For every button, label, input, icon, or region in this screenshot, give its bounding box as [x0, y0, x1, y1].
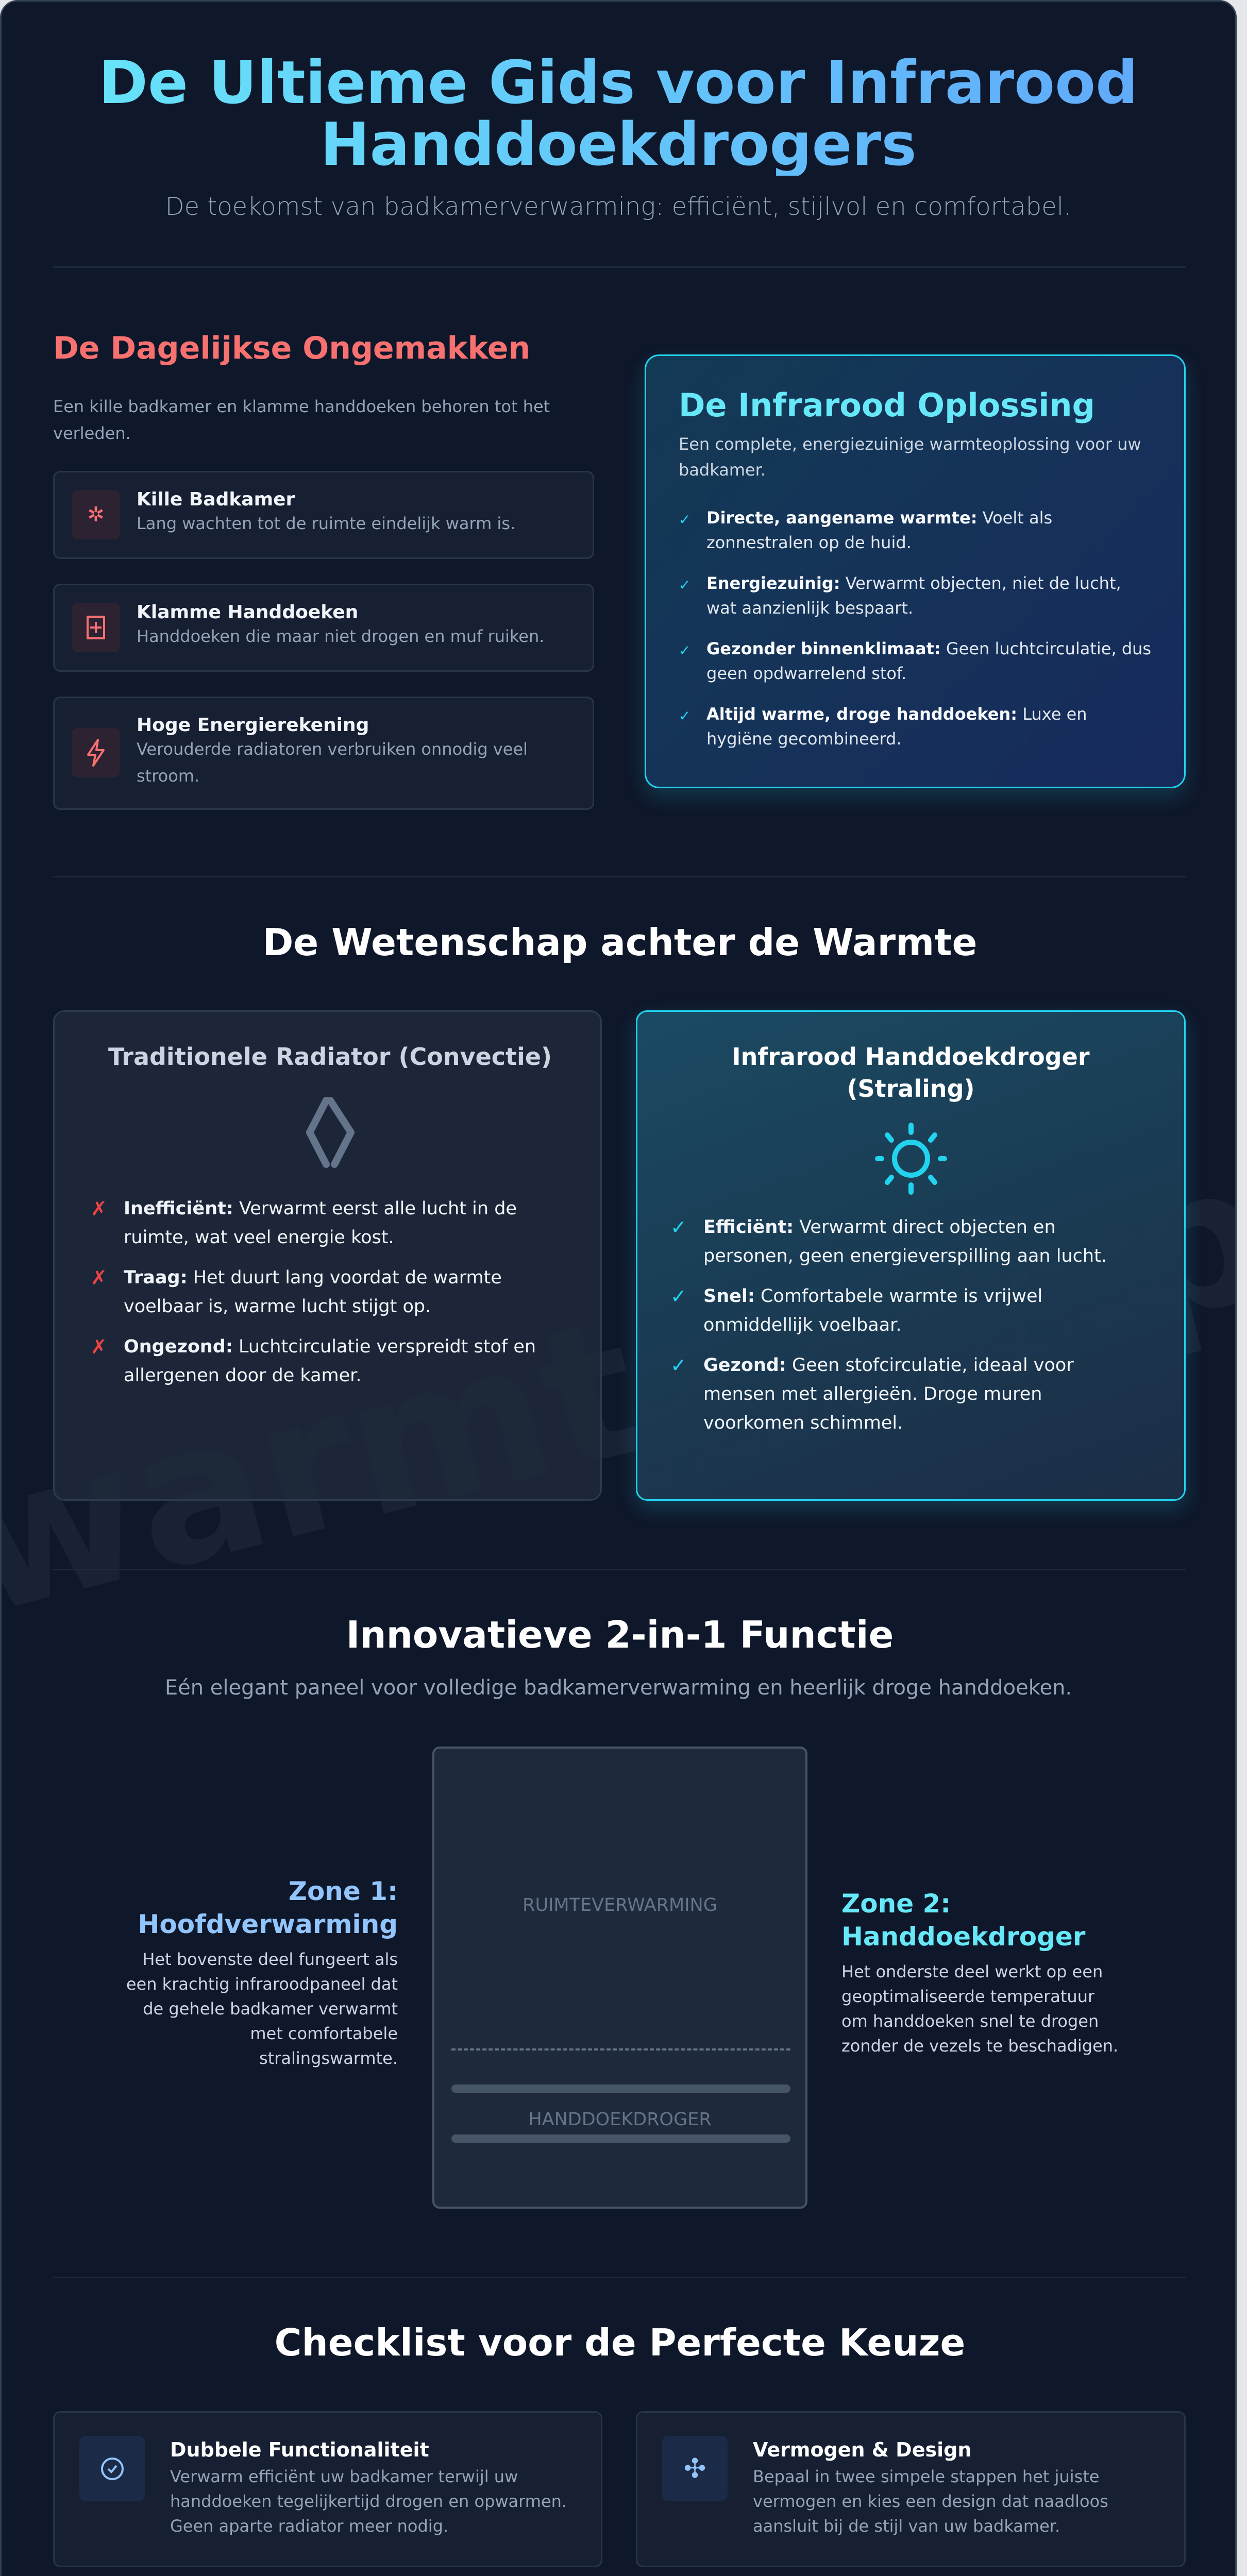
icon: puzzle: ✣ — [684, 2453, 706, 2484]
title: Handdoekdrogers — [320, 110, 917, 179]
solution intro: Een complete, energiezuinige warmteoplossing voor uw badkamer. — [679, 434, 1141, 480]
icon: snowflake — [72, 490, 120, 539]
icon: sun — [875, 1123, 947, 1195]
text: Vermogen & Design — [753, 2438, 971, 2461]
panel: infrarood oplossing — [645, 354, 1186, 788]
zone 2 text: Het onderste deel werkt op een geoptimaliseerde temperatuur om handdoeken snel te drogen zonder de vezels te beschadigen. — [841, 1962, 1118, 2056]
cons list: ✗ — [91, 1197, 107, 1220]
pros list: ✓ — [670, 1354, 687, 1377]
pros list — [670, 1216, 1107, 1433]
text — [137, 489, 515, 533]
solution list: ✓ — [679, 511, 690, 528]
text: Lang wachten tot de ruimte eindelijk warm is. — [137, 514, 515, 533]
card title — [732, 1043, 1089, 1103]
solution title: De Infrarood Oplossing — [679, 386, 1095, 424]
icon: snowflake: ✲ — [87, 503, 105, 527]
title: De Ultieme Gids voor Infrarood — [99, 48, 1138, 117]
solution list: Energiezuinig: Verwarmt objecten, niet de lucht, wat aanzienlijk bespaart. — [706, 573, 1121, 618]
heading: checklist: Checklist voor de Perfecte Keuze — [275, 2321, 965, 2364]
text: Kille Badkamer — [137, 489, 295, 510]
text: Bepaal in twee simpele stappen het juiste vermogen en kies een design dat naadloos aansluit bij de stijl van uw badkamer. — [753, 2467, 1108, 2536]
label: handdoekdroger: HANDDOEKDROGER — [528, 2109, 712, 2130]
zone 2 text: Handdoekdroger — [841, 1922, 1085, 1952]
zone 1 text: Hoofdverwarming — [138, 1909, 398, 1939]
zone 2 text — [841, 1889, 1118, 2056]
icon: towel — [72, 603, 120, 652]
zone 1 text: Zone 1: — [289, 1876, 398, 1906]
text: Hoge Energierekening — [137, 715, 369, 736]
text: Dubbele Functionaliteit — [170, 2438, 429, 2461]
card: klamme handdoeken — [53, 584, 594, 672]
icon: puzzle — [662, 2436, 728, 2501]
panel: infrarood handdoekdroger — [636, 1010, 1186, 1501]
zone 2 text: Zone 2: — [841, 1889, 951, 1919]
solution list: ✓ — [679, 707, 690, 724]
text: Klamme Handdoeken — [137, 602, 358, 623]
2-in-1 subtitle: Eén elegant paneel voor volledige badkamerverwarming en heerlijk droge handdoeken. — [165, 1676, 1072, 1700]
subtitle: De toekomst van badkamerverwarming: efficiënt, stijlvol en comfortabel. — [165, 192, 1071, 221]
icon: check circle — [79, 2436, 145, 2501]
cons list: Traag: Het duurt lang voordat de warmte voelbaar is, warme lucht stijgt op. — [124, 1267, 502, 1317]
text: Handdoeken die maar niet drogen en muf ruiken. — [137, 626, 544, 646]
pros list: Gezond: Geen stofcirculatie, ideaal voor mensen met allergieën. Droge muren voorkomen schimmel. — [703, 1355, 1074, 1433]
heading: wetenschap: De Wetenschap achter de Warmte — [263, 921, 977, 964]
card title: Infrarood Handdoekdroger — [732, 1043, 1089, 1071]
text: Verwarm efficiënt uw badkamer terwijl uw handdoeken tegelijkertijd drogen en opwarmen. Geen aparte radiator meer nodig. — [170, 2467, 567, 2536]
cons list: Inefficiënt: Verwarmt eerst alle lucht in de ruimte, wat veel energie kost. — [124, 1198, 517, 1248]
solution list — [679, 508, 1151, 749]
checklist card 1 — [53, 2411, 602, 2567]
solution list: ✓ — [679, 577, 690, 594]
title — [2, 52, 1235, 176]
card title: (Straling) — [847, 1075, 975, 1103]
solution list: Altijd warme, droge handdoeken: Luxe en hygiëne gecombineerd. — [706, 704, 1087, 749]
label: ruimteverwarming: RUIMTEVERWARMING — [523, 1895, 717, 1916]
heading: problems: De Dagelijkse Ongemakken — [53, 330, 530, 366]
zone 1 text — [126, 1876, 398, 2068]
text — [137, 602, 544, 646]
pros list: ✓ — [670, 1216, 687, 1239]
pros list: Efficiënt: Verwarmt direct objecten en personen, geen energieverspilling aan lucht. — [703, 1217, 1107, 1266]
card: kille badkamer — [53, 471, 594, 559]
device diagram — [432, 1747, 807, 2209]
solution list: ✓ — [679, 642, 690, 659]
icon: convection — [306, 1097, 355, 1168]
text: Verouderde radiatoren verbruiken onnodig veel stroom. — [137, 739, 528, 786]
solution list: Gezonder binnenklimaat: Geen luchtcirculatie, dus geen opdwarrelend stof. — [706, 639, 1151, 683]
checklist card 2 — [636, 2411, 1186, 2567]
text — [137, 715, 528, 786]
card: energierekening — [53, 697, 594, 810]
icon: bolt — [72, 728, 120, 777]
cons list — [91, 1197, 536, 1386]
panel: traditionele radiator — [53, 1010, 602, 1501]
solution list: Directe, aangename warmte: Voelt als zonnestralen op de huid. — [706, 508, 1052, 552]
pros list: ✓ — [670, 1285, 687, 1308]
card title: Traditionele Radiator (Convectie) — [108, 1043, 552, 1071]
pros list: Snel: Comfortabele warmte is vrijwel onmiddellijk voelbaar. — [703, 1286, 1042, 1335]
zone 1 text: Het bovenste deel fungeert als een krachtig infraroodpaneel dat de gehele badkamer verwarmt met comfortabele stralingswarmte. — [126, 1950, 398, 2068]
cons list: ✗ — [91, 1266, 107, 1289]
cons list: ✗ — [91, 1335, 107, 1358]
cons list: Ongezond: Luchtcirculatie verspreidt stof en allergenen door de kamer. — [124, 1336, 536, 1386]
heading: 2-in-1: Innovatieve 2-in-1 Functie — [346, 1613, 894, 1656]
problems intro: Een kille badkamer en klamme handdoeken behoren tot het verleden. — [53, 397, 550, 443]
